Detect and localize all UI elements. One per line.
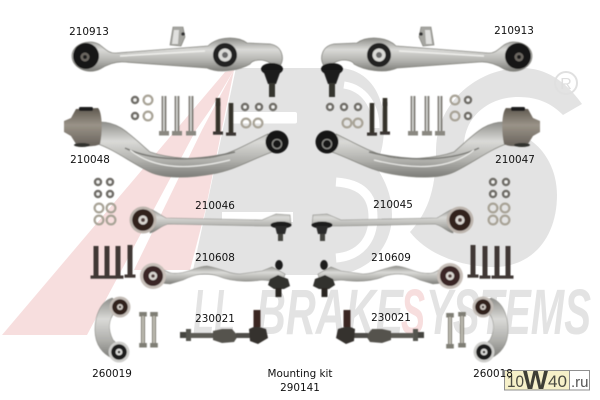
watermark: brand name: LL bbox=[193, 276, 235, 348]
hardware: small right bolts bbox=[446, 312, 466, 348]
hardware: upper right nuts and washers bbox=[326, 96, 472, 127]
watermark badge: 10W40.ru: 40 bbox=[548, 372, 567, 391]
part: stabilizer link left bbox=[95, 296, 130, 362]
hardware: middle left nuts and washers bbox=[94, 178, 115, 224]
hardware: upper left bolts bbox=[159, 96, 236, 136]
part: stabilizer link right bbox=[472, 296, 508, 362]
watermark: B bbox=[192, 68, 392, 275]
part: wavy arm right bbox=[313, 260, 463, 297]
watermark badge: 10W40.ru: .ru bbox=[571, 374, 589, 391]
watermark: brand name: BRAKE bbox=[256, 276, 404, 348]
part: upper arm left bbox=[72, 27, 283, 97]
hardware: lower left bolts bbox=[90, 245, 136, 279]
watermark: S bbox=[410, 68, 582, 267]
part: straight arm left bbox=[130, 206, 292, 241]
watermark badge: 10W40.ru bbox=[504, 365, 590, 395]
label: 210045: 210045 bbox=[373, 199, 413, 211]
watermark: A left leg bbox=[2, 70, 234, 335]
label: 210046: 210046 bbox=[195, 200, 235, 212]
hardware: middle right nuts and washers bbox=[489, 178, 510, 224]
label: 210047: 210047 bbox=[495, 154, 535, 166]
watermark: brand name: S bbox=[401, 276, 425, 348]
watermark badge: 10W40.ru: 10 bbox=[507, 372, 524, 391]
label: 260019: 260019 bbox=[92, 368, 132, 380]
part: straight arm right bbox=[312, 206, 474, 241]
label: 260018: 260018 bbox=[473, 368, 513, 380]
watermark: B counters bbox=[222, 112, 297, 222]
parts group bbox=[64, 27, 540, 362]
label: 210609: 210609 bbox=[371, 252, 411, 264]
watermark: brand name bbox=[193, 276, 591, 348]
label: 290141: 290141 bbox=[280, 382, 320, 394]
label: 230021 left: 230021 bbox=[195, 313, 235, 325]
label: 230021 right: 230021 bbox=[371, 312, 411, 324]
watermark: A right leg bbox=[134, 70, 234, 270]
watermark: ABS logo background bbox=[2, 68, 591, 348]
watermark: B lower counter bbox=[336, 182, 373, 258]
watermark: registered mark: R bbox=[560, 76, 572, 93]
label: 210913 left: 210913 bbox=[69, 26, 109, 38]
part: curved arm right bbox=[316, 107, 540, 177]
label: 210913 right: 210913 bbox=[494, 25, 534, 37]
hardware: lower right bolts bbox=[468, 245, 514, 279]
label: 210048: 210048 bbox=[70, 154, 110, 166]
watermark: registered mark bbox=[555, 72, 577, 94]
hardware: upper right bolts bbox=[367, 96, 445, 136]
label: 210608: 210608 bbox=[195, 252, 235, 264]
watermark badge: 10W40.ru: W bbox=[523, 365, 548, 395]
part: wavy arm left bbox=[140, 260, 290, 297]
part: tie rod left bbox=[180, 310, 268, 344]
label: mounting kit: Mounting kit bbox=[268, 368, 332, 380]
hardware: small left bolts bbox=[139, 312, 158, 348]
part: curved arm left bbox=[64, 107, 288, 177]
part: upper arm right bbox=[321, 27, 532, 97]
part: tie rod right bbox=[336, 310, 424, 344]
hardware: upper left nuts and washers bbox=[131, 96, 277, 127]
